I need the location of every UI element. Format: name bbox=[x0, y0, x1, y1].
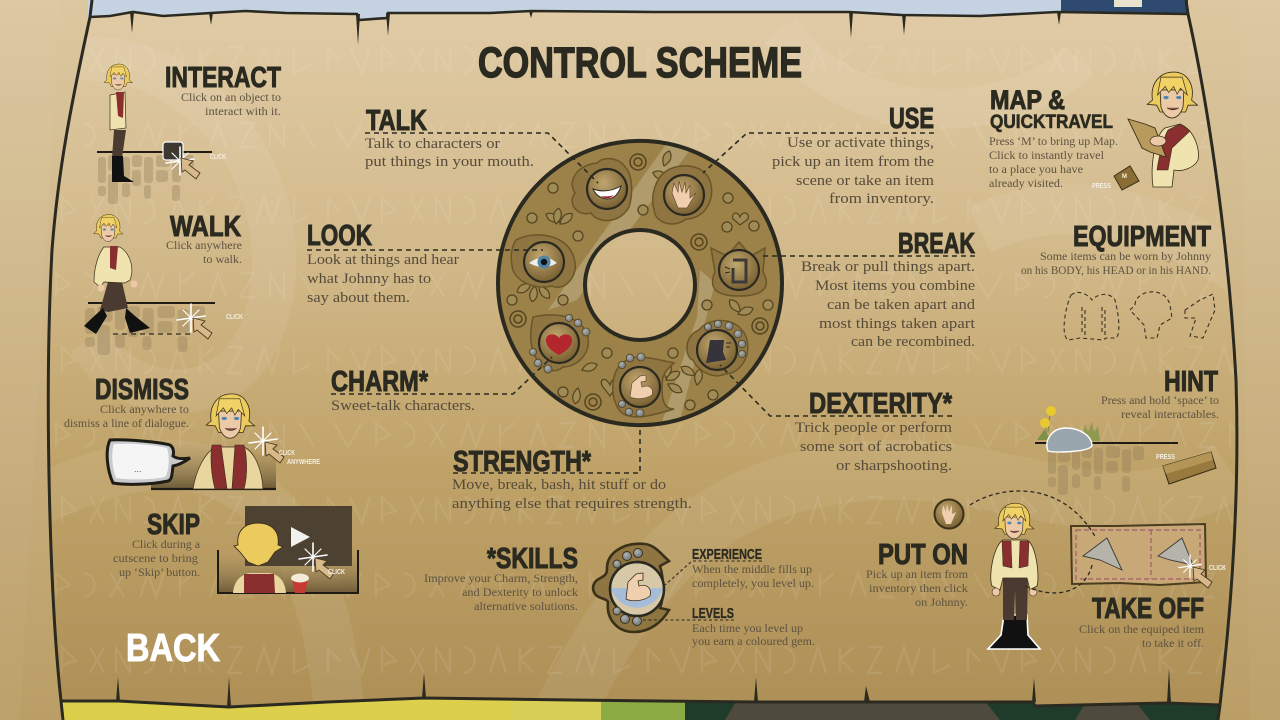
label: break: can be recombined. bbox=[851, 334, 975, 350]
levels text: LEVELS bbox=[692, 606, 734, 622]
illustration: Johnny reading map: PRESS bbox=[1092, 181, 1111, 190]
label: look: Look at things and hear bbox=[307, 252, 459, 268]
label: talk: put things in your mouth. bbox=[365, 154, 534, 170]
heading: walk: WALK bbox=[170, 211, 241, 243]
icon: break bbox=[711, 242, 766, 296]
equipment description: Some items can be worn by Johnny bbox=[1040, 249, 1211, 263]
icon: hand item bbox=[934, 500, 964, 528]
dismiss description bbox=[64, 402, 189, 430]
levels text: you earn a coloured gem. bbox=[692, 634, 815, 648]
gems bbox=[529, 314, 746, 417]
icon: look bbox=[511, 235, 575, 287]
heading: hint: HINT bbox=[1164, 366, 1218, 398]
interact description bbox=[181, 90, 281, 118]
icon: dexterity bbox=[687, 321, 748, 376]
illustration: Johnny standing by object: CLICK bbox=[210, 152, 226, 161]
label: look: what Johnny has to bbox=[307, 271, 431, 287]
walk description: Click anywhere bbox=[166, 238, 242, 252]
levels text bbox=[692, 606, 815, 648]
skills description: alternative solutions. bbox=[474, 599, 578, 613]
icon: strength bbox=[613, 357, 674, 417]
experience text: completely, you level up. bbox=[692, 576, 814, 590]
sky scene behind parchment bbox=[88, 0, 1188, 22]
illustration: dialogue scene: CLICK bbox=[279, 448, 295, 457]
label: strength: anything else that requires strength. bbox=[452, 496, 692, 512]
illustration: Johnny full body bbox=[988, 503, 1040, 649]
dismiss description: dismiss a line of dialogue. bbox=[64, 416, 189, 430]
label: dexterity: some sort of acrobatics bbox=[800, 439, 952, 455]
panel: interact bbox=[97, 62, 281, 204]
panel: equipment bbox=[1021, 221, 1215, 340]
label: use bbox=[772, 103, 935, 207]
put on description: Pick up an item from bbox=[866, 567, 969, 581]
speech bubble: ... bbox=[134, 464, 142, 474]
take off description bbox=[1079, 622, 1205, 650]
forest scene behind parchment bbox=[61, 695, 1219, 720]
map description: to a place you have bbox=[989, 162, 1083, 176]
heading: map and quicktravel: MAP & bbox=[990, 85, 1065, 115]
interact description: interact with it. bbox=[205, 104, 281, 118]
label: dexterity: DEXTERITY* bbox=[809, 388, 953, 420]
label: look: say about them. bbox=[307, 290, 410, 306]
label: break: most things taken apart bbox=[819, 316, 975, 332]
illustration: Johnny reading map bbox=[1092, 72, 1198, 190]
heading: dismiss: DISMISS bbox=[95, 374, 189, 406]
label: break bbox=[801, 228, 976, 350]
label: break: Break or pull things apart. bbox=[801, 259, 975, 275]
skills description: and Dexterity to unlock bbox=[462, 585, 578, 599]
label: look bbox=[307, 220, 459, 306]
label: talk: Talk to characters or bbox=[365, 136, 500, 152]
label: use: scene or take an item bbox=[796, 173, 935, 189]
back button: BACK bbox=[126, 627, 220, 670]
label: look: LOOK bbox=[307, 220, 372, 252]
panel: put on bbox=[866, 491, 1226, 650]
experience text: EXPERIENCE bbox=[692, 547, 762, 563]
label: dexterity: or sharpshooting. bbox=[836, 458, 952, 474]
hint description: Press and hold ‘space’ to bbox=[1101, 393, 1219, 407]
map description bbox=[989, 134, 1118, 190]
skip description: up ‘Skip’ button. bbox=[119, 565, 200, 579]
equipment description: on his BODY, his HEAD or in his HAND. bbox=[1021, 263, 1211, 277]
label: dexterity bbox=[795, 388, 953, 474]
walk description bbox=[166, 238, 242, 266]
illustration: rock on ground bbox=[1035, 406, 1216, 495]
label: charm: Sweet-talk characters. bbox=[331, 398, 475, 414]
title: CONTROL SCHEME bbox=[478, 39, 802, 87]
skip description: cutscene to bring bbox=[113, 551, 198, 565]
heading: skip: SKIP bbox=[147, 509, 200, 541]
panel: hint bbox=[1035, 366, 1219, 495]
put on description: inventory then click bbox=[869, 581, 968, 595]
heading: take off: TAKE OFF bbox=[1092, 593, 1204, 625]
dashed equipment slots bbox=[1064, 292, 1215, 340]
panel: dismiss bbox=[64, 374, 320, 489]
panel: map and quicktravel bbox=[989, 72, 1198, 190]
icon: play bbox=[291, 527, 310, 547]
label: use: Use or activate things, bbox=[787, 135, 934, 151]
skill emblem bbox=[593, 544, 669, 632]
illustration: dialogue scene: ANYWHERE bbox=[287, 457, 320, 466]
panel: skills bbox=[424, 543, 815, 648]
illustration: rock on ground: PRESS bbox=[1156, 452, 1175, 461]
icon: use bbox=[653, 166, 712, 224]
inventory panel: CLICK bbox=[1209, 563, 1226, 572]
label: talk bbox=[365, 105, 534, 170]
skills description: Improve your Charm, Strength, bbox=[424, 571, 578, 585]
take off description: to take it off. bbox=[1142, 636, 1204, 650]
label: charm: CHARM* bbox=[331, 366, 429, 398]
equipment description bbox=[1021, 249, 1211, 277]
put on description: on Johnny. bbox=[915, 595, 968, 609]
map description: Press ‘M’ to bring up Map. bbox=[989, 134, 1118, 148]
inventory panel bbox=[1071, 524, 1226, 588]
speech bubble bbox=[107, 440, 190, 484]
leader lines bbox=[307, 133, 975, 473]
skill wheel bbox=[498, 141, 782, 428]
experience text bbox=[692, 547, 814, 590]
heading: skills: *SKILLS bbox=[487, 543, 578, 575]
illustration: Johnny standing by object bbox=[97, 64, 226, 204]
illustration: Johnny walking bbox=[84, 214, 243, 355]
illustration: dialogue scene bbox=[107, 394, 320, 489]
wheel ring bbox=[498, 141, 782, 428]
label: use: from inventory. bbox=[829, 191, 934, 207]
heading: equipment: EQUIPMENT bbox=[1073, 221, 1211, 253]
icon: talk bbox=[572, 159, 632, 221]
label: talk: TALK bbox=[366, 105, 427, 137]
interact description: Click on an object to bbox=[181, 90, 281, 104]
illustration: cutscene: CLICK bbox=[328, 567, 345, 576]
panel: skip bbox=[113, 506, 358, 593]
heading: map and quicktravel bbox=[990, 85, 1113, 133]
walk description: to walk. bbox=[203, 252, 242, 266]
label: dexterity: Trick people or perform bbox=[795, 420, 953, 436]
take off description: Click on the equiped item bbox=[1079, 622, 1205, 636]
hint description: reveal interactables. bbox=[1121, 407, 1219, 421]
label: charm bbox=[331, 366, 475, 414]
illustration: cutscene bbox=[218, 506, 358, 593]
hint description bbox=[1101, 393, 1219, 421]
label: break: BREAK bbox=[898, 228, 975, 260]
heading: interact: INTERACT bbox=[165, 62, 281, 94]
levels text: Each time you level up bbox=[692, 621, 803, 635]
put on description bbox=[866, 567, 969, 609]
skip description: Click during a bbox=[132, 537, 201, 551]
label: use: pick up an item from the bbox=[772, 154, 934, 170]
label: strength bbox=[452, 446, 692, 512]
icon: space bar bbox=[1163, 452, 1216, 484]
icon: charm bbox=[531, 315, 588, 371]
label: use: USE bbox=[889, 103, 934, 135]
dashed arc arrows bbox=[970, 491, 1096, 593]
map description: already visited. bbox=[989, 176, 1063, 190]
map description: Click to instantly travel bbox=[989, 148, 1105, 162]
label: break: Most items you combine bbox=[815, 278, 975, 294]
label: break: can be taken apart and bbox=[827, 297, 976, 313]
label: strength: Move, break, bash, hit stuff or do bbox=[452, 477, 666, 493]
heading: put on: PUT ON bbox=[878, 539, 968, 571]
label: strength: STRENGTH* bbox=[453, 446, 592, 478]
skip description bbox=[113, 537, 201, 579]
illustration: Johnny walking: CLICK bbox=[226, 312, 243, 321]
skills description bbox=[424, 571, 578, 613]
panel: walk bbox=[84, 211, 243, 355]
dismiss description: Click anywhere to bbox=[100, 402, 189, 416]
experience text: When the middle fills up bbox=[692, 562, 812, 576]
icon: M key: M bbox=[1122, 174, 1127, 180]
heading: map and quicktravel: QUICKTRAVEL bbox=[990, 111, 1113, 133]
